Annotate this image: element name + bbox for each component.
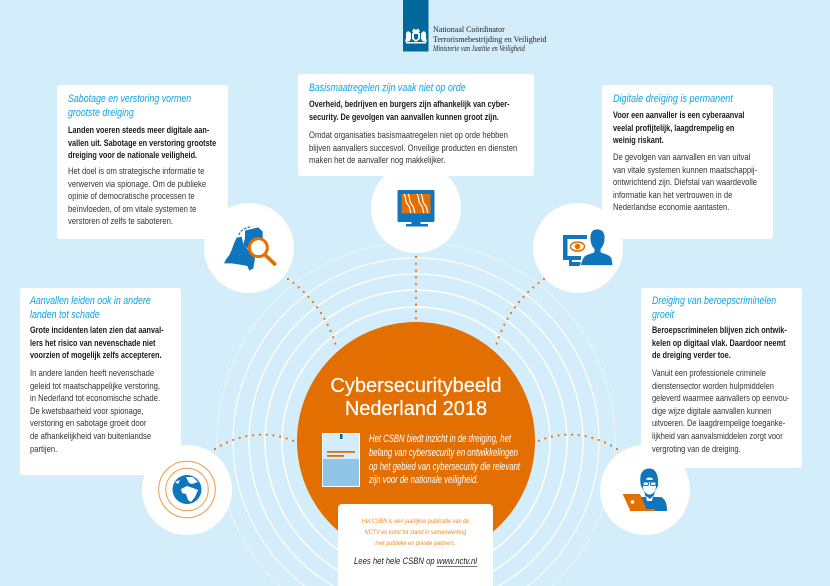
heading: Digitale dreiging is permanent: [613, 93, 733, 105]
body text: Vanuit een professionele criminele: [652, 368, 766, 378]
logo text: Nationaal Coördinator: [433, 25, 505, 34]
title: [330, 375, 502, 420]
icon disc: top left: [204, 203, 294, 293]
intro text in circle: [368, 433, 520, 486]
heading: [30, 295, 151, 321]
intro bold: voorzien of mogelijk zelfs accepteren.: [30, 350, 162, 360]
concentric rings: [217, 242, 615, 586]
heading: Dreiging van beroepscriminelen: [652, 295, 776, 307]
intro bold: Landen voeren steeds meer digitale aan-: [68, 125, 209, 135]
intro text in circle: belang van cybersecurity en ontwikkelingen: [369, 447, 518, 459]
body text: partijen.: [30, 444, 57, 454]
icon: Netherlands map with magnifier: [224, 226, 277, 271]
body text: De kwetsbaarheid voor spionage,: [30, 406, 143, 416]
body text: van vitale systemen kunnen maatschappij-: [613, 165, 757, 175]
link line: Lees het hele CSBN op www.nctv.nl: [354, 556, 477, 566]
intro bold: [30, 325, 164, 360]
orange note: met publieke en private partners.: [375, 540, 456, 547]
intro bold: [613, 110, 744, 145]
body text: geleid tot maatschappelijke verstoring,: [30, 381, 160, 391]
icon disc: bottom left: [142, 445, 232, 535]
logo: Rijksoverheid header: [403, 0, 546, 53]
body text: opinie of democratische processen te: [68, 191, 195, 201]
intro bold: weinig riskant.: [613, 135, 664, 145]
logo text: Ministerie van Justitie en Veiligheid: [433, 44, 525, 53]
heading: grootste dreiging: [68, 107, 134, 119]
intro bold: lers het risico van nevenschade niet: [30, 338, 155, 348]
body text: uitvoeren. De laagdrempelige toeganke-: [652, 418, 785, 428]
intro bold: veelal profijtelijk, laagdrempelig en: [613, 123, 734, 133]
body text: Het doel is om strategische informatie te: [68, 166, 204, 176]
body text: [68, 166, 206, 226]
icon: monitor with waves: [398, 190, 434, 226]
body text: [652, 368, 790, 454]
body text: geleverd waarmee aanvallers op eenvou-: [652, 393, 789, 403]
intro text in circle: zijn voor de nationale veiligheid.: [369, 474, 478, 486]
orange note: NCTV en komt tot stand in samenwerking: [365, 529, 466, 536]
intro bold: Overheid, bedrijven en burgers zijn afhankelijk van cyber-: [309, 99, 510, 109]
panel: basismaatregelen: [298, 74, 534, 176]
heading: Aanvallen leiden ook in andere: [30, 295, 151, 307]
heading: Sabotage en verstoring vormen: [68, 93, 191, 105]
body text: verwerven via spionage. Om de publieke: [68, 179, 206, 189]
body text: blijven aanvallers succesvol. Onveilige producten en diensten: [309, 143, 517, 153]
intro text in circle: Het CSBN biedt inzicht in de dreiging, het: [369, 433, 511, 445]
intro text in circle: op het gebied van cybersecurity die relevant: [369, 461, 520, 473]
icon disc: top right: [533, 203, 623, 293]
body text: verstoren of zelfs te saboteren.: [68, 216, 173, 226]
title: Cybersecuritybeeld: [330, 375, 502, 397]
body text: vergroting van de dreiging.: [652, 444, 741, 454]
body text: ontwrichtend zijn. Diefstal van waardevolle: [613, 177, 757, 187]
title: Nederland 2018: [345, 398, 487, 420]
icon: globe with orange rings: [158, 460, 216, 518]
panel: aanvallen andere landen: [20, 288, 181, 475]
intro bold: de dreiging verder toe.: [652, 350, 731, 360]
body text: In andere landen heeft nevenschade: [30, 368, 154, 378]
intro bold: Beroepscriminelen blijven zich ontwik-: [652, 325, 787, 335]
intro bold: [68, 125, 216, 160]
icon disc: bottom right: [600, 445, 690, 535]
intro bold: [652, 325, 787, 360]
orange note: Het CSBN is een jaarlijkse publicatie van de: [362, 518, 469, 525]
intro bold: Voor een aanvaller is een cyberaanval: [613, 110, 744, 120]
intro bold: security. De gevolgen van aanvallen kunnen groot zijn.: [309, 112, 499, 122]
body text: maken het de aanvaller nog makkelijker.: [309, 155, 445, 165]
body text: [613, 152, 757, 212]
orange note: [362, 518, 469, 547]
body text: Nederlandse economie aantasten.: [613, 202, 729, 212]
heading: [68, 93, 191, 119]
intro bold: Grote incidenten laten zien dat aanval-: [30, 325, 164, 335]
body text: dienstensector worden hulpmiddelen: [652, 381, 774, 391]
body text: De gevolgen van aanvallen en van uitval: [613, 152, 750, 162]
heading: Basismaatregelen zijn vaak niet op orde: [309, 82, 466, 94]
body text: informatie kan het vertrouwen in de: [613, 190, 732, 200]
body text: verstoring en sabotage groeit door: [30, 418, 146, 428]
heading: groeit: [652, 309, 674, 321]
body text: de afhankelijkheid van buitenlandse: [30, 431, 151, 441]
heading: landen tot schade: [30, 309, 100, 321]
body text: dige wijze digitale aanvallen kunnen: [652, 406, 771, 416]
intro bold: kelen op digitaal vlak. Daardoor neemt: [652, 338, 786, 348]
central orange circle: [297, 322, 535, 560]
logo text: [432, 25, 546, 53]
panel: sabotage: [57, 85, 228, 239]
report thumbnail: [322, 433, 360, 487]
intro bold: [309, 99, 510, 122]
icon disc: top centre: [371, 163, 461, 253]
icon: user watching monitor with eye: [563, 229, 612, 266]
dotted connectors: [215, 257, 617, 449]
logo text: Terrorismebestrijding en Veiligheid: [433, 35, 546, 44]
body text: Omdat organisaties basismaatregelen niet op orde hebben: [309, 130, 508, 140]
body text: [309, 130, 517, 165]
icon: hacker with laptop: [622, 468, 667, 511]
logo ribbon: [403, 0, 428, 52]
panel: beroepscriminelen: [641, 288, 802, 468]
intro bold: dreiging voor de nationale veiligheid.: [68, 150, 197, 160]
callout: where to read the CSBN: [338, 504, 493, 586]
body text: in Nederland tot economische schade.: [30, 393, 160, 403]
panel: digitale dreiging: [602, 85, 773, 239]
body text: lijkheid van aanvalsmiddelen zorgt voor: [652, 431, 783, 441]
body text: beïnvloeden, of om vitale systemen te: [68, 204, 196, 214]
heading: [652, 295, 776, 321]
body text: [30, 368, 160, 454]
intro bold: vallen uit. Sabotage en verstoring grootste: [68, 138, 216, 148]
